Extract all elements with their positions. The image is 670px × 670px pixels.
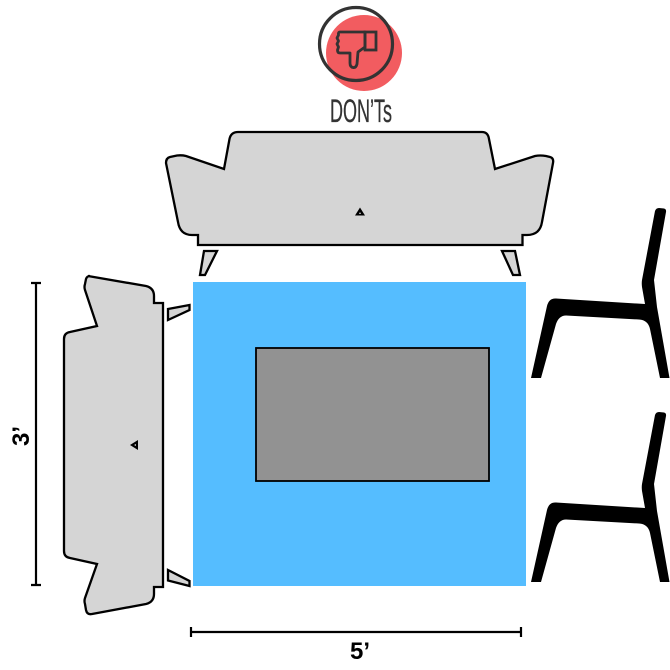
sofa: left — [64, 276, 190, 614]
sofa: top — [166, 132, 553, 275]
dimension label: 3': 3’ — [8, 426, 35, 446]
dimension line: 5 feet — [191, 627, 521, 637]
chair: lower — [531, 412, 670, 582]
dimension label: 5': 5’ — [350, 638, 370, 665]
rug — [193, 282, 526, 586]
coffee table — [256, 348, 489, 481]
dimension line: 3 feet — [31, 283, 41, 585]
heading: DON'Ts: DON’Ts — [330, 93, 392, 129]
chair: upper — [531, 208, 670, 378]
icon: thumbs down badge — [320, 8, 402, 91]
